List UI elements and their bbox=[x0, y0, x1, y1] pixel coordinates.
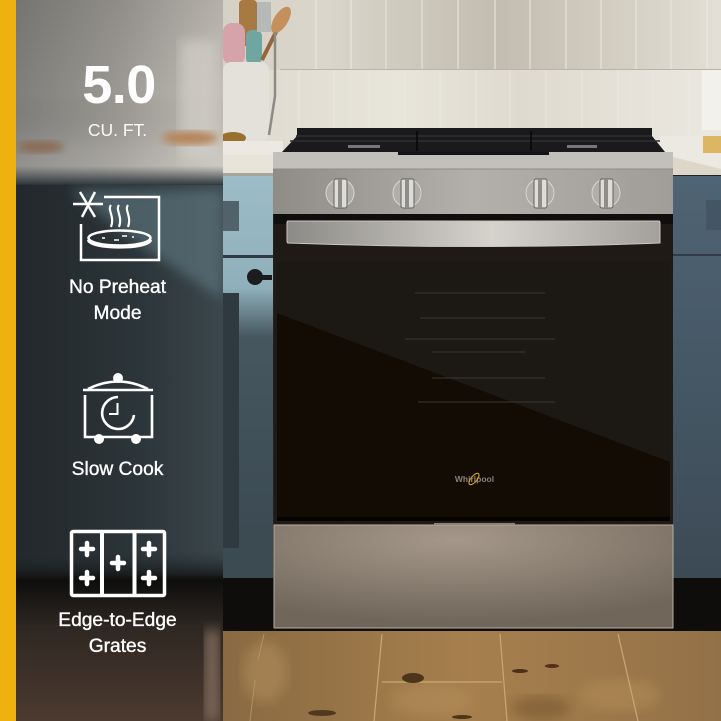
oven door bbox=[274, 214, 673, 524]
label: slow cook: Slow Cook bbox=[72, 459, 163, 480]
storage drawer bbox=[274, 523, 673, 628]
icon: edge-to-edge grates bbox=[72, 531, 164, 596]
label: edge-to-edge grates bbox=[58, 610, 177, 657]
brand logo bbox=[455, 472, 494, 486]
cabinets bbox=[223, 176, 721, 578]
wall tiles bbox=[223, 0, 721, 160]
icon: slow cook pot bbox=[83, 373, 153, 444]
range bbox=[273, 128, 673, 628]
countertop bbox=[223, 136, 721, 176]
utensil crock bbox=[220, 0, 295, 144]
heading: capacity unit: CU. FT. bbox=[88, 120, 147, 140]
label: no preheat mode: No Preheat bbox=[69, 277, 166, 298]
blurred left panel bbox=[16, 0, 223, 721]
label: no preheat mode bbox=[69, 277, 166, 324]
icon: no preheat oven bbox=[73, 192, 159, 260]
oven handle bbox=[287, 221, 660, 246]
control panel bbox=[273, 152, 673, 214]
brand logo: Whirlpool bbox=[455, 474, 494, 484]
toe kick and floor bbox=[223, 578, 721, 721]
heading: capacity number: 5.0 bbox=[82, 55, 156, 115]
label: edge-to-edge grates: Grates bbox=[89, 636, 146, 657]
yellow accent bar bbox=[0, 0, 16, 721]
label: no preheat mode: Mode bbox=[94, 303, 142, 324]
cooktop grates bbox=[282, 128, 665, 152]
control knobs bbox=[326, 179, 620, 208]
label: edge-to-edge grates: Edge-to-Edge bbox=[58, 610, 177, 631]
